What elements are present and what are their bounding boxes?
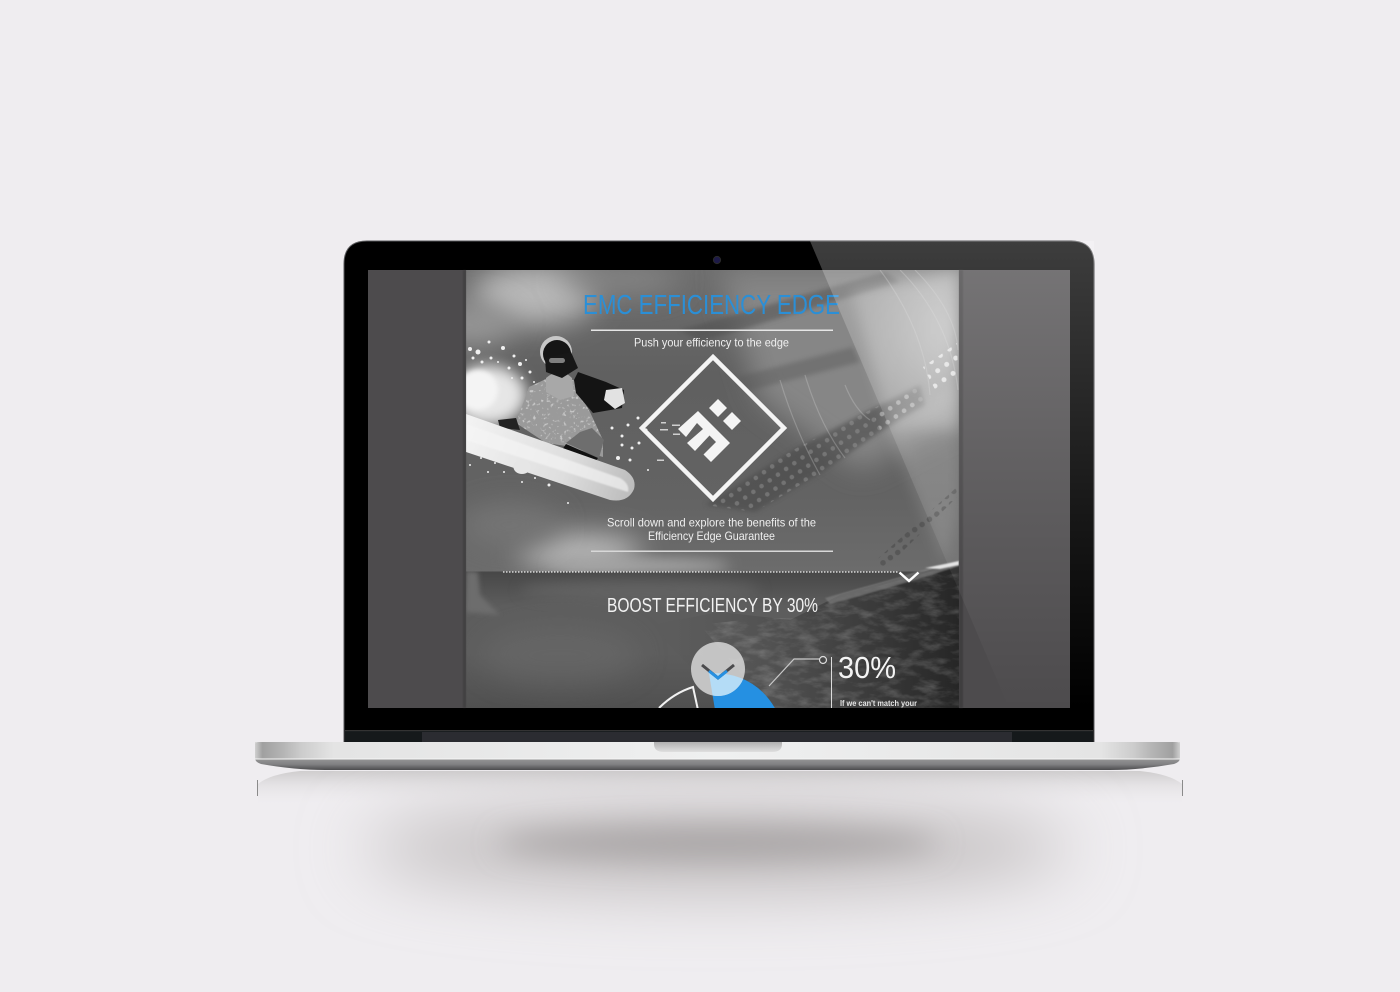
snowboard [466,414,635,501]
infographic page [425,265,959,710]
thumb notch [654,742,782,752]
screen [368,265,1070,710]
laptop lid [344,241,1094,742]
callout leader line [769,656,826,686]
hero caption: Efficiency Edge Guarantee [648,529,775,543]
callout divider [831,657,832,709]
subtitle: Push your efficiency to the edge [634,336,789,350]
section heading: BOOST EFFICIENCY BY 30% [607,595,818,617]
hinge strip [345,730,1093,742]
bottom divider [591,550,833,552]
hero caption [608,518,816,542]
hero title: EMC EFFICIENCY EDGE [583,289,840,320]
boot [514,468,528,474]
rider glove [604,388,625,409]
snowboarder [450,336,649,504]
webcam [713,256,721,264]
section divider: dotted line and chevron [503,572,918,581]
rider legs and jacket [498,372,624,463]
screen side panels [368,270,1070,708]
hero sky background [425,265,959,574]
callout figure: 30% [838,650,896,685]
pie chart: blue segment [712,679,775,708]
callout text: If we can't match your [840,698,918,708]
clouds [466,270,730,572]
screen glare [810,241,1094,638]
laptop base reflection and floor shadow [257,771,1183,890]
laptop base [255,742,1180,770]
scroll button [691,642,745,696]
rider helmet and face [540,336,578,378]
mountain ridge [746,562,959,708]
hero caption: Scroll down and explore the benefits of the [607,516,816,530]
top divider [591,330,833,331]
diamond logo [642,357,784,499]
halftone bands and rays [680,270,959,567]
snow spray [450,340,649,504]
pie chart: white outlined segment [659,687,698,710]
mountain section background [466,561,959,708]
page edge shadow [463,270,963,708]
